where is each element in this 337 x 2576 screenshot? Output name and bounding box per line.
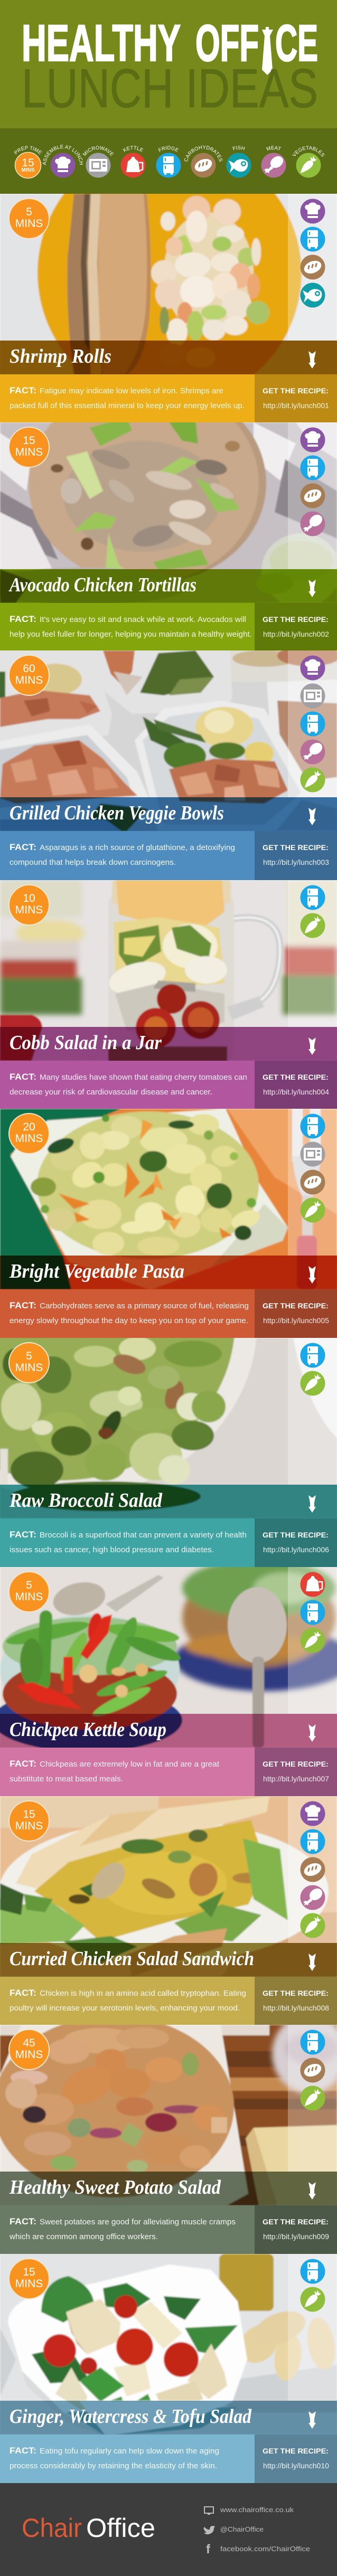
arrow [308,1954,316,1971]
recipe link panel: http://bit.ly/lunch001 [263,401,329,410]
fact panel: FACT: [10,1530,36,1540]
photo: chickpea soup bowls [0,1559,337,1752]
title: HEALTHY [22,14,181,72]
prep time badge [9,427,49,467]
prep time badge [9,885,49,925]
recipe link panel: GET THE RECIPE: [263,843,329,852]
prep time badge: MINS [15,1133,43,1145]
legend: assemble at lunch: ASSEMBLE AT LUNCH [42,145,83,165]
prep time badge [9,1801,49,1841]
title: I [264,17,270,70]
light strip [288,2254,337,2401]
prep time badge: 10 [23,892,35,904]
section: Chickpea Kettle Soup [0,1559,337,1796]
legend: meat [261,146,286,177]
legend: carbohydrates [184,145,223,177]
fact panel: issues such as cancer, high blood pressure and diabetes. [10,1545,214,1554]
prep time badge [9,2030,49,2070]
legend: prep time: 15 [22,157,34,169]
recipe link panel: GET THE RECIPE: [263,2447,329,2455]
icons [300,1572,325,1653]
prep time badge: 60 [23,663,35,675]
section: Shrimp Rolls [0,194,337,422]
legend: assemble at lunch [42,145,83,177]
legend: fridge: FRIDGE [158,146,179,152]
recipe link panel: GET THE RECIPE: [263,615,329,624]
arrow [308,1724,316,1742]
fact panel: FACT: [10,2446,36,2456]
recipe link panel [255,1518,337,1567]
arrow [308,1495,316,1513]
fact panel: FACT: [10,1072,36,1082]
fact panel [0,1748,255,1796]
section: Curried Chicken Salad Sandwich [0,1796,337,2025]
fact panel: Asparagus is a rich source of glutathione, a detoxifying [40,843,235,852]
fact panel: Chickpeas are extremely low in fat and are a great [40,1760,220,1769]
recipe title: Ginger, Watercress & Tofu Salad [10,2405,252,2428]
legend: prep time [14,146,42,178]
legend: microwave [82,146,114,177]
legend: vegetables: VEGETABLES [292,146,324,157]
fact panel: energy slowly throughout the day to keep you on top of your game. [10,1316,248,1325]
prep time badge: MINS [15,1820,43,1832]
recipe link panel [255,1977,337,2025]
section: Raw Broccoli Salad [0,1338,337,1567]
section: Avocado Chicken Tortillas [0,422,337,650]
logo [22,2513,155,2543]
title: OFF [195,14,259,72]
title band [0,1943,337,1977]
fact panel: Fatigue may indicate low levels of iron. Shrimps are [40,386,223,395]
title band [0,569,337,603]
recipe title: Raw Broccoli Salad [9,1489,163,1512]
legend: fish: FISH [232,146,245,150]
photo: salad jar [0,880,337,1062]
legend band [0,128,337,194]
prep time badge: MINS [15,1362,43,1374]
photo: pasta on white plate [0,1109,337,1290]
light strip [288,1567,337,1714]
fact panel [0,831,255,880]
recipe link panel [255,1289,337,1338]
prep time badge: MINS [15,904,43,916]
title band [0,1485,337,1518]
prep time badge: 5 [26,206,32,218]
section: Ginger, Watercress & Tofu Salad [0,2254,337,2483]
section: Cobb Salad in a Jar [0,880,337,1109]
recipe link panel: GET THE RECIPE: [263,1989,329,1997]
recipe title: Curried Chicken Salad Sandwich [10,1948,254,1970]
section: Grilled Chicken Veggie Bowls [0,635,337,880]
prep time badge [9,655,49,695]
fact panel [0,1061,255,1109]
fact panel [0,2205,255,2254]
arrow [308,1266,316,1284]
fact panel: Chicken is high in an amino acid called tryptophan. Eating [40,1989,246,1998]
recipe link panel [255,831,337,880]
recipe link panel: http://bit.ly/lunch006 [263,1545,329,1554]
fact panel: FACT: [10,614,36,624]
footer [0,2483,337,2576]
prep time badge: 5 [26,1350,32,1362]
arrow [308,580,316,597]
icon: twitter [204,2526,215,2534]
light strip [288,1338,337,1485]
photo: broccoli salad bowl [0,1338,337,1518]
header background [0,0,337,128]
recipe link panel [255,603,337,650]
icons [300,1801,325,1938]
recipe title: Chickpea Kettle Soup [10,1719,166,1741]
recipe link panel: http://bit.ly/lunch004 [263,1088,329,1096]
legend: vegetables [292,146,324,177]
section: Healthy Sweet Potato Salad [0,2014,337,2254]
prep time badge: 15 [23,2266,35,2278]
photo: meal prep containers [0,635,337,833]
recipe link panel [255,2435,337,2483]
recipe title: Bright Vegetable Pasta [9,1260,184,1282]
fact panel: It's very easy to sit and snack while at work. Avocados will [40,615,246,624]
recipe title: Shrimp Rolls [10,345,111,367]
recipe title: Grilled Chicken Veggie Bowls [10,802,224,824]
prep time badge [9,2259,49,2299]
prep time badge: 15 [23,1808,35,1820]
fact panel: FACT: [10,842,36,852]
prep time badge [9,199,49,239]
arrow [308,1037,316,1055]
recipe link panel: GET THE RECIPE: [263,1301,329,1310]
logo: Office [86,2513,155,2543]
arrow [308,2411,316,2429]
recipe link panel: http://bit.ly/lunch005 [263,1316,329,1325]
photo: tofu salad bowl [0,2254,337,2436]
legend: kettle [120,146,146,177]
fact panel: FACT: [10,1300,36,1310]
title band [0,1256,337,1289]
recipe link panel: GET THE RECIPE: [263,1531,329,1539]
prep time badge: 5 [26,1579,32,1591]
recipe link panel: http://bit.ly/lunch007 [263,1775,329,1783]
prep time badge: MINS [15,674,43,686]
icons [300,2030,325,2111]
fact panel: compound that helps break down carcinogens. [10,858,176,867]
recipe link panel [255,1748,337,1796]
fact panel [0,2435,255,2483]
fact panel: FACT: [10,1759,36,1769]
icons [300,199,325,307]
light strip [288,1796,337,1943]
prep time badge: MINS [15,2049,43,2061]
photo: sweet potato salad [0,2014,337,2205]
recipe link panel: GET THE RECIPE: [263,1073,329,1081]
recipe link panel [255,1061,337,1109]
prep time badge: MINS [15,446,43,458]
recipe link panel [255,2205,337,2254]
fact panel: help you feel fuller for longer, helping you maintain a healthy weight. [10,630,252,639]
legend: meat: MEAT [266,146,281,151]
icons [300,428,325,536]
title band [0,797,337,831]
light strip [288,880,337,1027]
arrow [308,2182,316,2200]
prep time badge [9,1572,49,1612]
fact panel: substitute to meat based meals. [10,1775,123,1784]
fact panel [0,1518,255,1567]
light strip [288,422,337,569]
fact panel: Carbohydrates serve as a primary source of fuel, releasing [40,1301,249,1310]
fact panel: process considerably by retaining the elasticity of the skin. [10,2461,217,2470]
prep time badge: MINS [15,2278,43,2290]
arrow [308,351,316,369]
recipe title: Healthy Sweet Potato Salad [9,2176,221,2198]
section: Bright Vegetable Pasta [0,1109,337,1338]
recipe link panel: http://bit.ly/lunch010 [263,2461,329,2470]
arrow [308,808,316,825]
fact panel: packed full of this essential mineral to keep your energy levels up. [10,401,245,410]
fact panel: Many studies have shown that eating cherry tomatoes can [40,1073,247,1082]
recipe link panel [255,374,337,422]
legend: fish [226,146,251,177]
prep time badge: 15 [23,435,35,447]
title band [0,2172,337,2205]
title band [0,2401,337,2435]
legend: carbohydrates: CARBOHYDRATES [184,145,223,162]
website: www.chairoffice.co.uk [220,2506,294,2514]
fact panel: which are common among office workers. [9,2232,158,2241]
fact panel [0,1977,255,2025]
fact panel [0,374,255,422]
photo: shrimp roll on yellow plate [0,194,337,374]
legend: kettle: KETTLE [123,146,144,152]
icons [300,1114,325,1223]
recipe link panel: GET THE RECIPE: [263,2218,329,2226]
recipe title: Avocado Chicken Tortillas [8,574,196,596]
legend: prep time: MINS [21,167,35,173]
icons [300,885,325,938]
light strip [288,194,337,341]
prep time badge [9,1114,49,1154]
fact panel: FACT: [10,1988,36,1998]
icon: monitor [204,2506,214,2515]
legend: fridge [156,146,181,177]
recipe link panel: http://bit.ly/lunch002 [263,630,329,638]
fact panel: Broccoli is a superfood that can prevent a variety of health [40,1531,247,1540]
recipe link panel: http://bit.ly/lunch003 [263,858,329,866]
photo: curried chicken pita [0,1796,337,1977]
prep time badge [9,1343,49,1383]
prep time badge: 45 [23,2037,35,2049]
facebook url: facebook.com/ChairOffice [220,2545,310,2553]
photo: tortilla on foil [0,422,337,603]
fact panel: FACT: [10,2216,36,2226]
fact panel [0,1289,255,1338]
title band [0,341,337,374]
title [22,14,318,119]
fact panel [0,603,255,650]
icon: facebook: f [206,2542,211,2556]
recipe link panel: http://bit.ly/lunch008 [263,2004,329,2012]
prep time badge: MINS [15,1591,43,1603]
recipe link panel: http://bit.ly/lunch009 [263,2232,329,2241]
icons [300,656,325,792]
recipe link panel: GET THE RECIPE: [263,1760,329,1768]
light strip [288,650,337,797]
icons [300,1343,325,1396]
recipe link panel: GET THE RECIPE: [263,386,329,395]
fact panel: Eating tofu regularly can help slow down the aging [40,2447,219,2456]
prep time badge: MINS [15,218,43,230]
fact panel: Sweet potatoes are good for alleviating muscle cramps [40,2218,236,2226]
fact panel: poultry will increase your serotonin levels, enhancing your mood. [10,2004,240,2013]
icons [300,2259,325,2311]
title band [0,1714,337,1748]
twitter handle: @ChairOffice [220,2526,264,2533]
logo: Chair [22,2513,82,2543]
light strip [288,2025,337,2172]
prep time badge: 20 [23,1121,35,1133]
fact panel: FACT: [10,385,36,395]
title band [0,1027,337,1061]
legend: prep time: PREP TIME [14,146,42,155]
light strip [288,1109,337,1256]
legend: microwave: MICROWAVE [82,146,114,156]
recipe title: Cobb Salad in a Jar [10,1032,162,1054]
fact panel: decrease your risk of cardiovascular disease and cancer. [10,1088,212,1097]
